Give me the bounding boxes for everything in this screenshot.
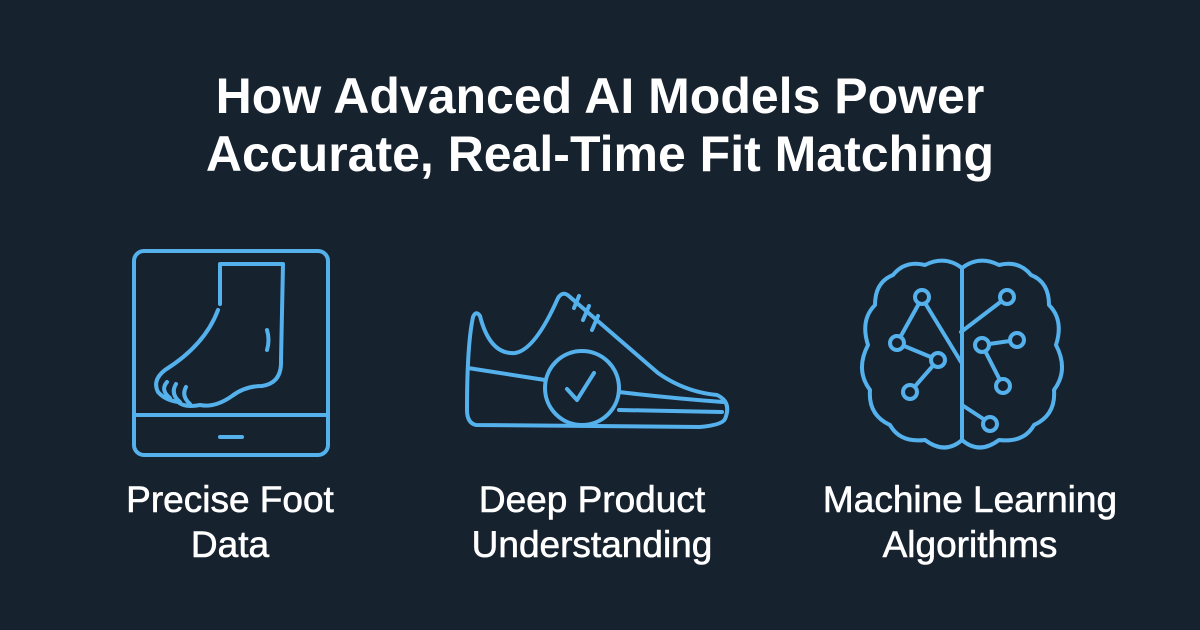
label: machine learning [823,479,1117,565]
label: machine learning: Machine Learning [823,479,1117,520]
icon: tablet with foot [134,251,328,455]
label: foot data [126,479,334,565]
label: product understanding: Deep Product [479,479,705,520]
label: product understanding [472,479,712,565]
label: foot data: Data [191,524,269,565]
label: foot data: Precise Foot [126,479,334,520]
label: machine learning: Algorithms [883,524,1057,565]
title [206,68,994,182]
title: Accurate, Real-Time Fit Matching [206,126,994,182]
label: product understanding: Understanding [472,524,712,565]
icon: brain network [862,261,1062,448]
icon: shoe with check [467,294,727,427]
title: How Advanced AI Models Power [216,68,984,124]
